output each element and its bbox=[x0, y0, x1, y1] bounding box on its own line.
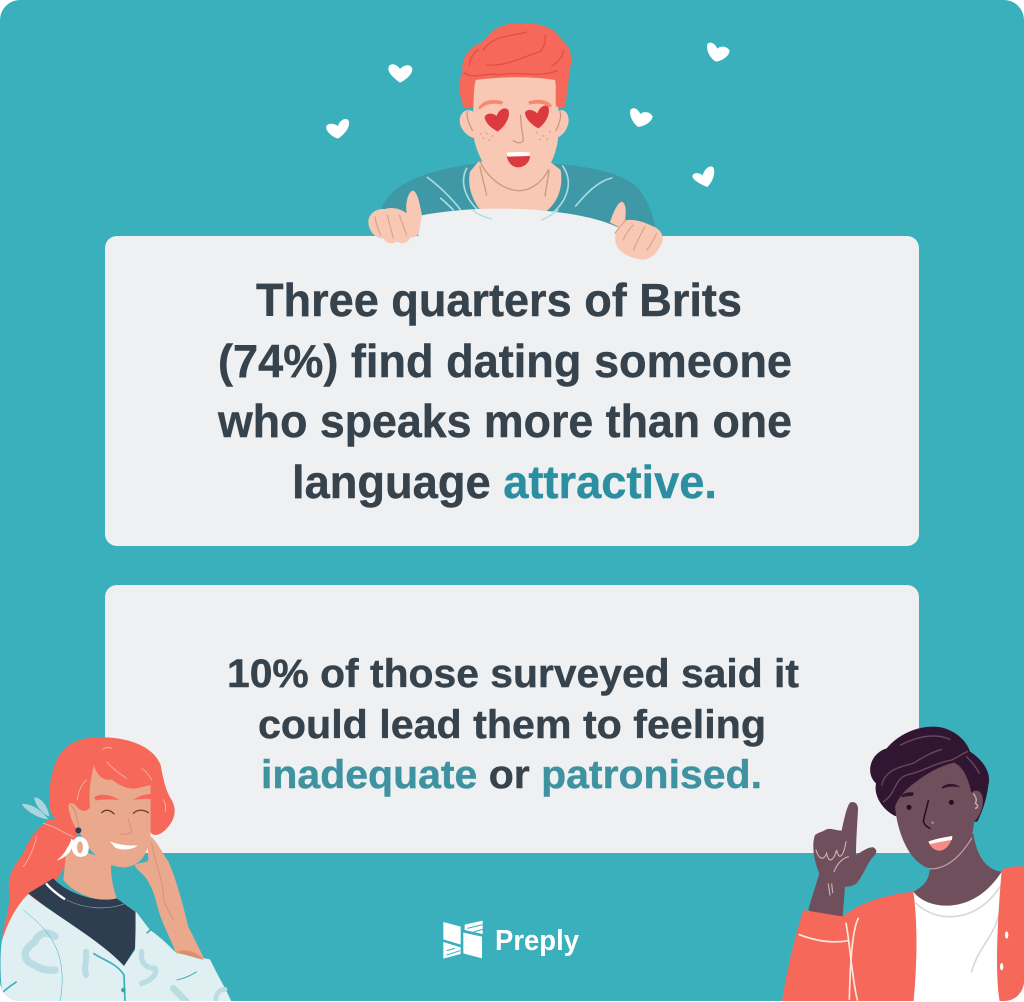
neck bbox=[469, 162, 561, 213]
icons: white hearts bbox=[326, 43, 730, 187]
hair bbox=[870, 727, 989, 823]
neck bbox=[63, 847, 117, 900]
logo: Preply bbox=[443, 921, 579, 959]
left hand bbox=[368, 191, 422, 243]
heading: attractive statistic: language attractive. bbox=[292, 456, 717, 508]
buttons bbox=[1005, 931, 1008, 939]
jacket bbox=[1, 894, 232, 1002]
nose bbox=[120, 818, 132, 834]
face bbox=[68, 765, 151, 867]
text block: inadequate statistic: 10% of those surveyed said it bbox=[227, 652, 799, 696]
illustration: man with heart eyes bbox=[368, 23, 663, 260]
cuff shadow bbox=[177, 950, 204, 960]
eyebrows bbox=[478, 100, 503, 109]
hair lines bbox=[464, 32, 563, 76]
text block: inadequate statistic: could lead them to feeling bbox=[258, 703, 766, 747]
jacket right bbox=[997, 866, 1024, 1002]
panel: 74% statistic card bbox=[105, 236, 919, 546]
hair lines bbox=[882, 736, 979, 802]
panel: 10% statistic card bbox=[105, 585, 919, 853]
eyebrows bbox=[94, 795, 119, 801]
face bbox=[895, 763, 983, 869]
jaw line bbox=[929, 838, 972, 869]
white shirt bbox=[912, 872, 1003, 1002]
hand bbox=[135, 835, 204, 959]
right hand bbox=[610, 202, 663, 260]
heading: attractive statistic: who speaks more than one bbox=[217, 395, 792, 447]
closed eyes bbox=[102, 810, 148, 814]
jacket pattern bbox=[25, 933, 225, 1002]
jaw and nose lines bbox=[467, 112, 561, 196]
heading: attractive statistic: Three quarters of Brits bbox=[256, 274, 742, 326]
illustration: man pointing finger bbox=[782, 727, 1024, 1002]
neck bbox=[914, 834, 1002, 906]
smile bbox=[110, 842, 138, 849]
hair main bbox=[49, 737, 175, 835]
collar overlap lines bbox=[473, 210, 558, 220]
jacket details bbox=[799, 918, 858, 1000]
eyes bbox=[906, 805, 911, 810]
jacket seams bbox=[2, 910, 197, 1002]
shirt lines bbox=[916, 887, 1000, 972]
ear shadow bbox=[71, 805, 79, 827]
icon: open book bbox=[443, 921, 483, 959]
hair strands bbox=[23, 747, 166, 867]
ear detail bbox=[973, 793, 978, 808]
jacket left bbox=[782, 892, 916, 1002]
hair bbox=[460, 23, 571, 108]
shirt bbox=[382, 163, 656, 230]
heading: attractive statistic bbox=[217, 274, 792, 508]
nose bbox=[923, 801, 930, 828]
heading: attractive statistic: (74%) find dating someone bbox=[218, 335, 792, 387]
paper fold bbox=[418, 209, 618, 237]
face bbox=[473, 68, 558, 191]
dark top bbox=[28, 878, 136, 966]
text block: inadequate statistic bbox=[227, 652, 799, 797]
ears bbox=[460, 110, 477, 138]
collar lines bbox=[427, 166, 612, 220]
finger lines bbox=[816, 842, 848, 895]
text block: inadequate statistic: inadequate or patronised. bbox=[261, 753, 762, 797]
mouth bbox=[507, 155, 530, 167]
eyebrows bbox=[902, 792, 914, 797]
hair clip leaves bbox=[22, 804, 48, 819]
illustration: woman with red hair bbox=[1, 737, 232, 1002]
raised arm and hand bbox=[808, 802, 876, 920]
heart eyes bbox=[485, 108, 509, 132]
earring bbox=[75, 827, 81, 833]
wordmark: Preply bbox=[495, 925, 579, 957]
mouth bbox=[928, 836, 952, 851]
freckles bbox=[480, 131, 551, 141]
hair back bbox=[2, 820, 83, 937]
